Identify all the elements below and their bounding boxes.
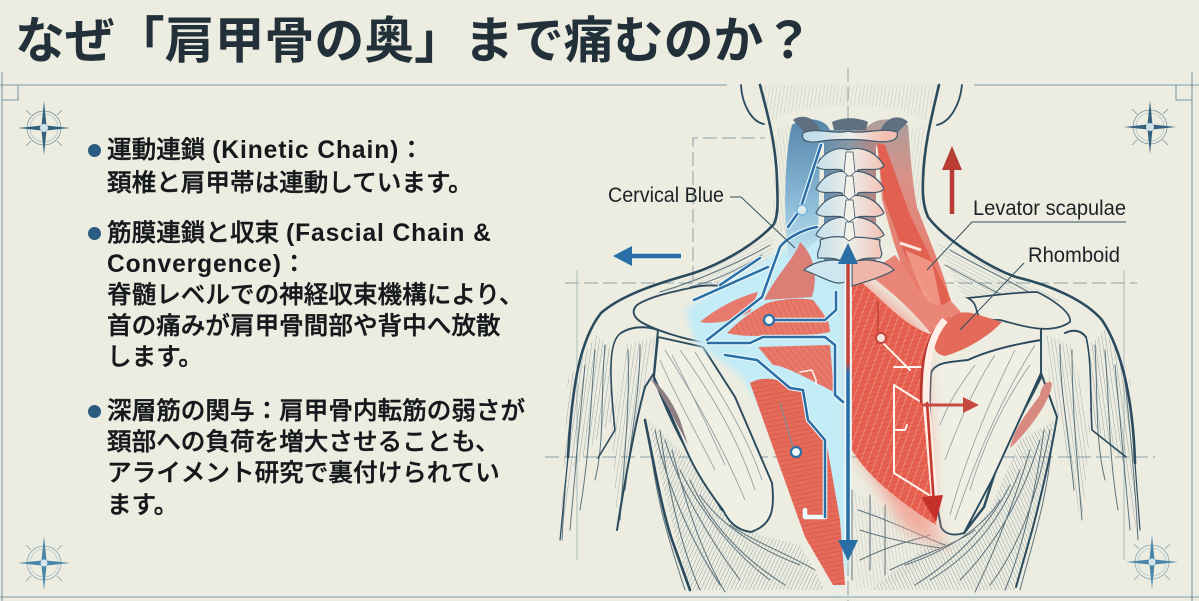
arrow: central double arrow bbox=[838, 243, 858, 561]
icon: compass top right bbox=[1124, 100, 1176, 154]
bullet: fascial chain and convergence: 脊髄レベルでの神経収束機構により、 bbox=[107, 282, 524, 309]
spinous processes bbox=[844, 152, 855, 241]
bullet: kinetic chain: 運動連鎖 (Kinetic Chain)： bbox=[107, 137, 424, 164]
neck muscles bbox=[785, 119, 951, 325]
label: Cervical Blue bbox=[608, 184, 795, 248]
bullet: kinetic chain bbox=[88, 136, 473, 197]
label: Cervical Blue: Cervical Blue bbox=[608, 184, 724, 207]
bullet: fascial chain and convergence: します。 bbox=[107, 344, 203, 371]
left rhomboid and trapezius muscles in red bbox=[700, 242, 845, 585]
bullet: deep muscle involvement: アライメント研究で裏付けられてい bbox=[107, 460, 500, 487]
bullet: deep muscle involvement: 頚部への負荷を増大させることも、 bbox=[107, 429, 500, 456]
right scapula bbox=[930, 340, 1041, 535]
bullet: deep muscle involvement bbox=[88, 398, 525, 519]
bullet: fascial chain and convergence: 筋膜連鎖と収束 (Fascial Chain & bbox=[107, 220, 492, 247]
bullet: kinetic chain: 頚椎と肩甲帯は連動しています。 bbox=[107, 170, 473, 197]
blue nerve lines bbox=[694, 145, 843, 517]
title: なぜ「肩甲骨の奥」まで痛むのか？ bbox=[15, 13, 813, 69]
left scapula bbox=[654, 337, 773, 532]
arrow: red pointing up bbox=[942, 146, 962, 214]
label: Rhomboid: Rhomboid bbox=[1028, 244, 1120, 267]
icon: compass bottom right bbox=[1126, 536, 1178, 588]
icon: compass top left bbox=[18, 101, 70, 155]
left clavicle bbox=[634, 285, 755, 342]
back and lat hatching bbox=[560, 330, 1138, 590]
spine backdrop bbox=[793, 117, 908, 265]
bullet: deep muscle involvement: ます。 bbox=[107, 492, 178, 519]
right clavicle bbox=[968, 292, 1070, 329]
cervical vertebrae bbox=[803, 130, 897, 286]
bullet: fascial chain and convergence bbox=[88, 220, 524, 371]
white and red circuit lines on right muscle bbox=[876, 302, 935, 495]
left blue fascia glow bbox=[685, 235, 848, 590]
right red glow bbox=[852, 270, 952, 550]
right muscles in red bbox=[650, 255, 1052, 525]
hand-drawn fibre strokes bbox=[562, 245, 1138, 592]
arrow: blue pointing left bbox=[613, 246, 681, 266]
icon: compass bottom left bbox=[18, 536, 70, 590]
scapula shading bbox=[660, 345, 1035, 520]
arrow: red pointing right bbox=[922, 397, 979, 413]
arrow: long red line down bbox=[921, 320, 945, 522]
bullet: fascial chain and convergence: Convergence)： bbox=[107, 251, 306, 278]
label: Rhomboid bbox=[960, 244, 1120, 330]
neck and trapezius skin hatching bbox=[640, 85, 1062, 320]
bullet: deep muscle involvement: 深層筋の関与：肩甲骨内転筋の弱さが bbox=[107, 398, 525, 425]
shoulder and arm outlines bbox=[560, 85, 1140, 590]
bullet: fascial chain and convergence: 首の痛みが肩甲骨間部や背中へ放散 bbox=[107, 313, 501, 340]
label: Levator scapulae: Levator scapulae bbox=[973, 197, 1126, 220]
label: Levator scapulae bbox=[927, 197, 1126, 270]
